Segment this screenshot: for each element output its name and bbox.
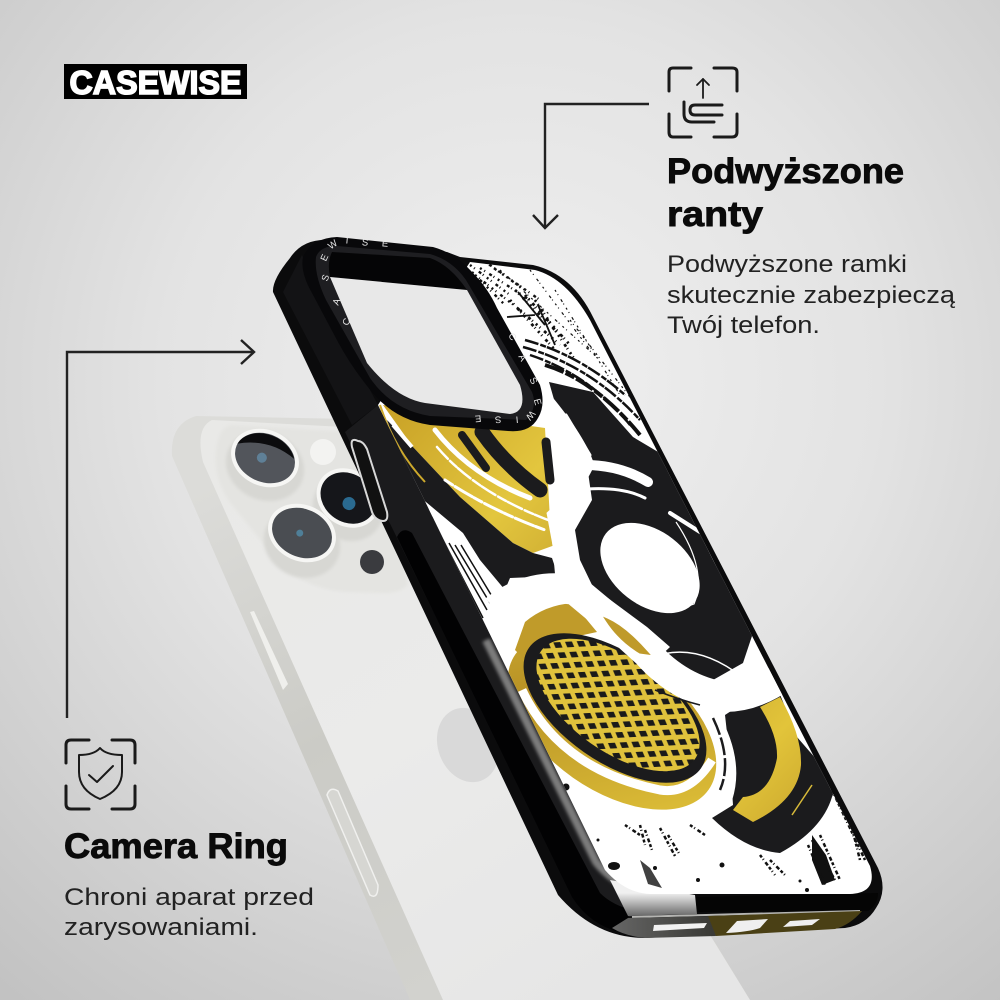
bottom silver line (632, 911, 860, 917)
ring lettering: E (531, 398, 543, 406)
white streak over top blob (540, 372, 645, 448)
white edge strokes (393, 425, 432, 517)
gold sweep (383, 405, 555, 553)
lower speckles (562, 784, 835, 892)
ring lettering: S (527, 376, 539, 386)
big black ring (549, 382, 753, 680)
ring lettering: I (515, 413, 519, 425)
white crescent inside gold (522, 690, 712, 791)
bottom strip translucent (612, 916, 716, 938)
white ring band (495, 588, 785, 697)
ring lettering: A (331, 296, 344, 307)
lens collar: right (301, 462, 395, 554)
port holes (653, 923, 707, 931)
icon: raised edges (669, 68, 737, 137)
arrow: top callout to raised edges (533, 104, 649, 228)
case shell (273, 240, 883, 938)
ring lettering: I (345, 235, 349, 247)
white strokes in gold (435, 430, 548, 530)
ring lettering: W (523, 408, 537, 422)
text: camera ring description (64, 884, 314, 941)
text: raised edges description: skutecznie zabezpieczą (667, 282, 955, 309)
bottom strip bronze (708, 911, 862, 936)
thin gold stroke lower right (792, 785, 812, 815)
lens collar: bottom (253, 496, 351, 590)
ring outer (302, 237, 543, 431)
black line on band (655, 690, 700, 705)
white central oval (600, 522, 700, 614)
white brush rings (547, 400, 700, 585)
white phone behind the case (172, 416, 750, 1000)
right outer black arc (712, 687, 834, 853)
heading: Camera Ring: Camera Ring (64, 827, 288, 866)
ring lettering: A (516, 353, 529, 364)
lower splatter streaks (625, 785, 872, 885)
ring lettering: S (320, 273, 332, 283)
oval contour (676, 522, 699, 606)
white base (378, 262, 872, 894)
gold arc right (733, 697, 801, 822)
black band under gold (387, 420, 558, 590)
side button upper (250, 611, 288, 690)
ring face sheen (316, 246, 534, 420)
mesh (536, 638, 700, 772)
lens: bottom (259, 493, 345, 573)
upper left side sheen (283, 255, 378, 425)
black strokes in gold (462, 432, 550, 490)
ring lettering: S (361, 237, 369, 249)
phone body side (172, 416, 750, 1000)
lens collar: top (215, 419, 315, 513)
arc in lower lobe (668, 651, 732, 670)
ring lettering: E (381, 238, 389, 250)
ring lettering (319, 235, 543, 425)
ring opening (330, 277, 522, 414)
top black streaks (507, 292, 640, 435)
thin black right of mesh (713, 718, 725, 790)
camera ring (302, 235, 543, 431)
sensor (360, 550, 384, 574)
lower side slot (397, 530, 632, 932)
ring lettering: E (319, 253, 331, 263)
bottom band glossy (610, 880, 697, 916)
ring lettering: E (474, 412, 482, 424)
text: camera ring description: Chroni aparat przed (64, 884, 314, 911)
white stroke right of mesh (726, 730, 736, 799)
gold upper patch (515, 604, 597, 652)
ring lettering: S (494, 413, 502, 425)
apple logo (427, 699, 509, 791)
black rim (524, 633, 706, 783)
left hatch marks (444, 540, 492, 618)
logo: CASEWISE: CASEWISE (70, 64, 242, 101)
icon: shield check (66, 740, 135, 809)
gold edge streak (380, 405, 425, 482)
text: raised edges description (667, 251, 955, 339)
case artwork (378, 262, 872, 894)
heading: Podwyższone ranty: Podwyższone (667, 152, 904, 191)
ring lettering: C (506, 331, 519, 343)
phone back (200, 420, 750, 1000)
text: camera ring description: zarysowaniami. (64, 914, 258, 941)
side button lower (327, 789, 378, 896)
gold ellipse (508, 646, 716, 810)
black phone case (273, 240, 883, 938)
lower side band (345, 405, 650, 918)
arrow: camera ring callout (67, 340, 254, 718)
flash (310, 439, 336, 465)
gold streak on band (607, 620, 647, 653)
heading: Podwyższone ranty: ranty (667, 195, 764, 234)
lens: right (305, 456, 391, 540)
text: raised edges description: Twój telefon. (667, 312, 820, 339)
top speckle splatter (469, 264, 630, 398)
ring lettering: W (326, 238, 340, 252)
bottom band black (695, 893, 878, 912)
heading: Podwyższone ranty (667, 152, 904, 234)
glossy edge highlight (486, 640, 650, 895)
ring upper recess (329, 252, 467, 290)
side button (352, 440, 387, 521)
lens: top (222, 418, 308, 498)
text: raised edges description: Podwyższone ramki (667, 251, 907, 278)
ring lettering: C (341, 317, 353, 327)
camera plateau (216, 425, 408, 593)
